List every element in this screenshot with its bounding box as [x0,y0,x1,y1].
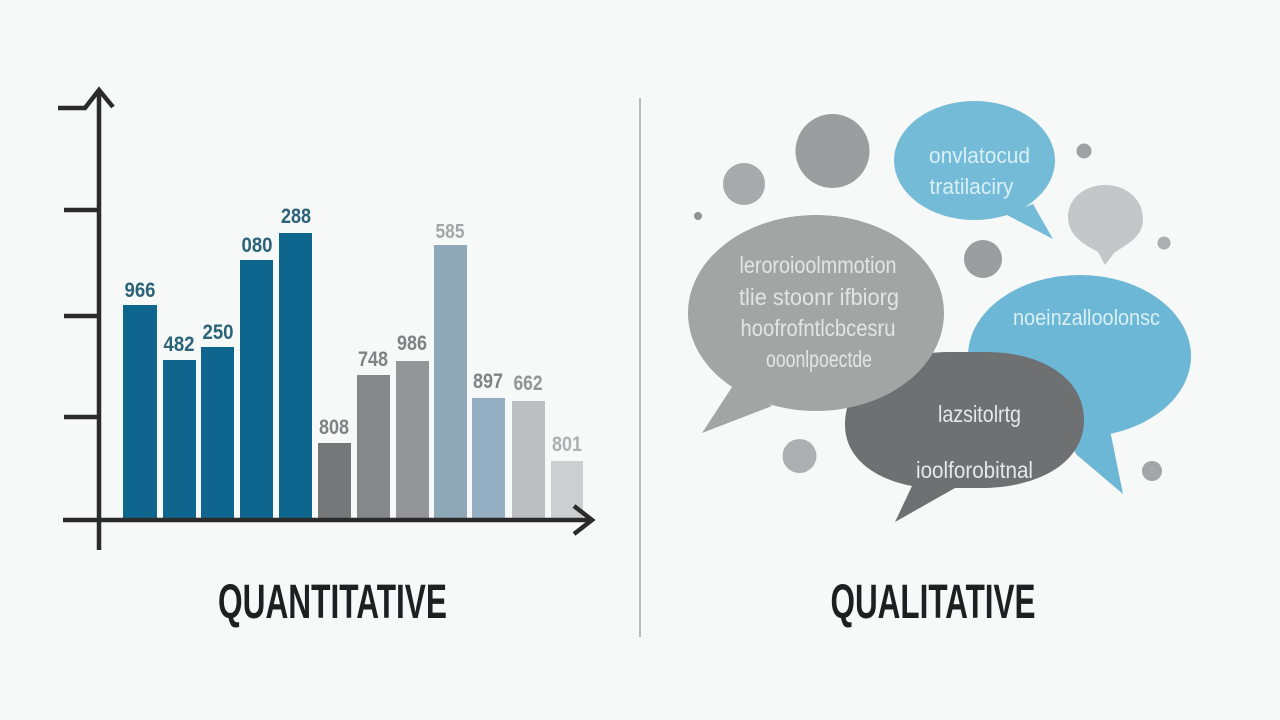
value labels: gray bars: 748 [358,348,388,371]
value labels: gray bars: 808 [319,416,349,439]
y axis with arrow and ticks [58,90,113,550]
bubble: large blue: noeinzalloolonsc [1013,305,1160,330]
bubble: small blue: onvlatocud [929,143,1030,168]
bubble: large gray [688,215,944,433]
value labels: blue bars [124,205,311,356]
value labels: gray bars: 897 [473,370,503,393]
value labels: gray bars: 986 [397,332,427,355]
decorative circles [694,114,1170,481]
center divider [639,98,641,637]
bubble: large gray: tlie stoonr ifbiorg [739,284,899,310]
value labels: gray bars: 801 [552,433,582,456]
heading: quantitative: QUANTITATIVE [218,576,447,629]
bubble: light gray [1068,185,1143,265]
heading: qualitative: QUALITATIVE [830,576,1036,629]
value labels: gray bars [319,221,582,456]
bubble: large gray: leroroioolmmotion [740,252,896,278]
bubble: large gray: hoofrofntlcbcesru [740,315,896,341]
bubble: large gray: ooonlpoectde [766,346,872,372]
value labels: blue bars: 966 [124,279,156,302]
bubble: large blue [968,275,1191,494]
value labels: blue bars: 482 [164,333,194,356]
value labels: blue bars: 288 [281,205,311,228]
panel: quantitative chart [58,90,592,550]
x axis with arrow [63,506,592,534]
bubble: small blue: tratilaciry [930,174,1014,199]
value labels: blue bars: 250 [202,321,234,344]
value labels: gray bars: 585 [436,221,464,243]
bubble: dark gray: ioolforobitnal [916,457,1033,483]
value labels: blue bars: 080 [242,234,272,257]
value labels: gray bars: 662 [514,372,542,395]
bars: gray group [318,245,583,520]
bubble: dark gray [845,352,1084,522]
bubble: dark gray: lazsitolrtg [938,401,1021,427]
bars: blue group [123,233,312,520]
panel: qualitative bubbles [688,101,1191,522]
bubble: small blue [894,101,1055,239]
